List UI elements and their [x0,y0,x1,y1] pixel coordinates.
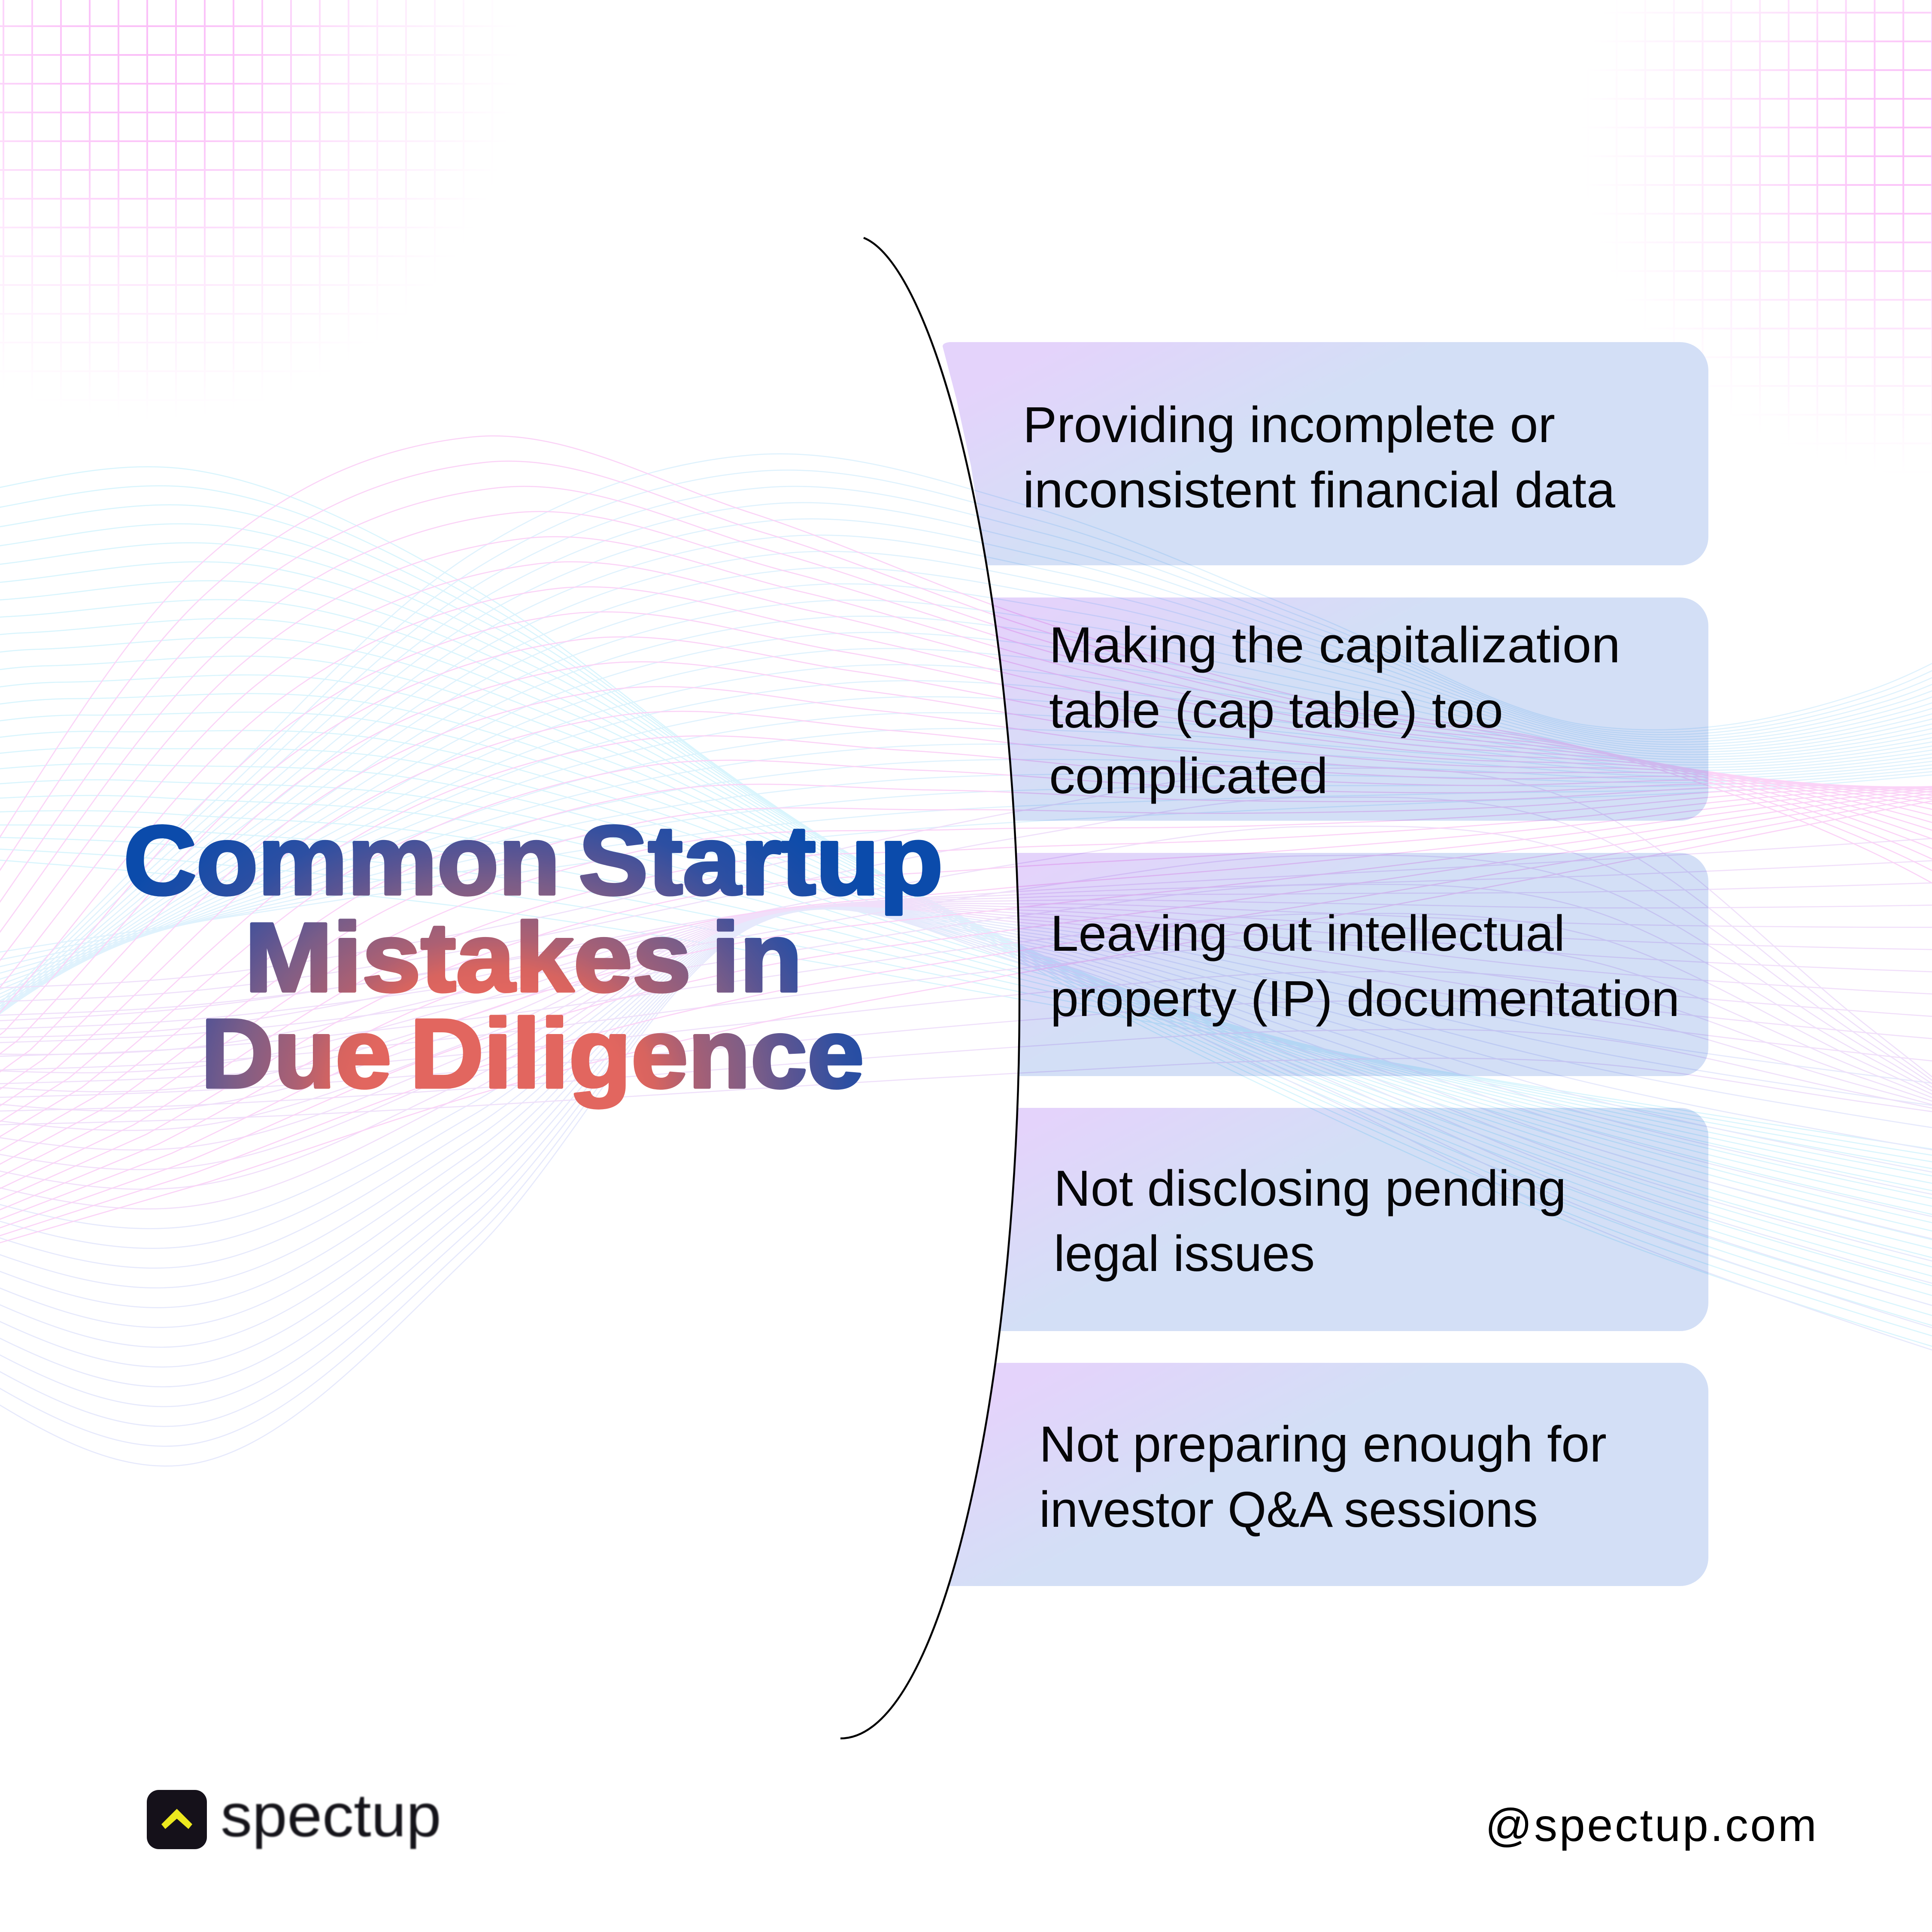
decorative grid: top left [0,0,468,369]
decorative wave line bundles [0,436,1932,1466]
curved divider arc [840,238,1019,1738]
card 4 text: legal issues [1054,1225,1315,1282]
card 1: financial data [901,342,1708,565]
card 2: cap table [992,597,1708,821]
logo: spectup [147,1781,441,1850]
card 2 text: table (cap table) too [1049,682,1503,739]
card 2 text: Making the capitalization [1049,617,1620,673]
title line 1 [124,806,943,915]
card 1 text: inconsistent financial data [1023,462,1615,519]
card 5 text [1039,1416,1607,1538]
card 3 background [901,853,1708,1076]
card 2 text: complicated [1049,748,1328,804]
card 1 background [901,342,1708,565]
title line 2: in [711,903,802,1012]
card 2 background [992,597,1708,821]
decorative grid: top right [1628,0,1932,429]
title line 2: Mistakes [245,903,691,1012]
title line 3: Due [201,999,391,1108]
handle: @spectup.com: @spectup.com [1485,1799,1817,1851]
title line 1: Common [124,806,560,915]
card 1 text: Providing incomplete or [1023,397,1555,453]
logo icon: yellow chevron [161,1809,192,1829]
card 3 text: Leaving out intellectual [1050,905,1565,962]
card 4 text: Not disclosing pending [1054,1160,1566,1217]
card 5: investor Q&A [901,1363,1708,1586]
card 5 background [901,1363,1708,1586]
card 1 text [1023,397,1615,519]
card 3 text: property (IP) documentation [1050,971,1680,1027]
title line 3: Diligence [410,999,864,1108]
title [124,806,943,1108]
title line 1: Startup [579,806,943,915]
card 4 background [901,1108,1708,1331]
title line 3 [201,999,864,1108]
card 3: IP documentation [901,853,1708,1076]
card 3 text [1050,905,1680,1027]
card 4: legal issues [901,1108,1708,1331]
logo icon: rounded square [147,1790,207,1849]
card 5 text: investor Q&A sessions [1039,1481,1538,1538]
card 4 text [1054,1160,1566,1282]
logo wordmark: spectup [221,1781,441,1850]
card 2 text [1049,617,1620,804]
card 5 text: Not preparing enough for [1039,1416,1607,1473]
